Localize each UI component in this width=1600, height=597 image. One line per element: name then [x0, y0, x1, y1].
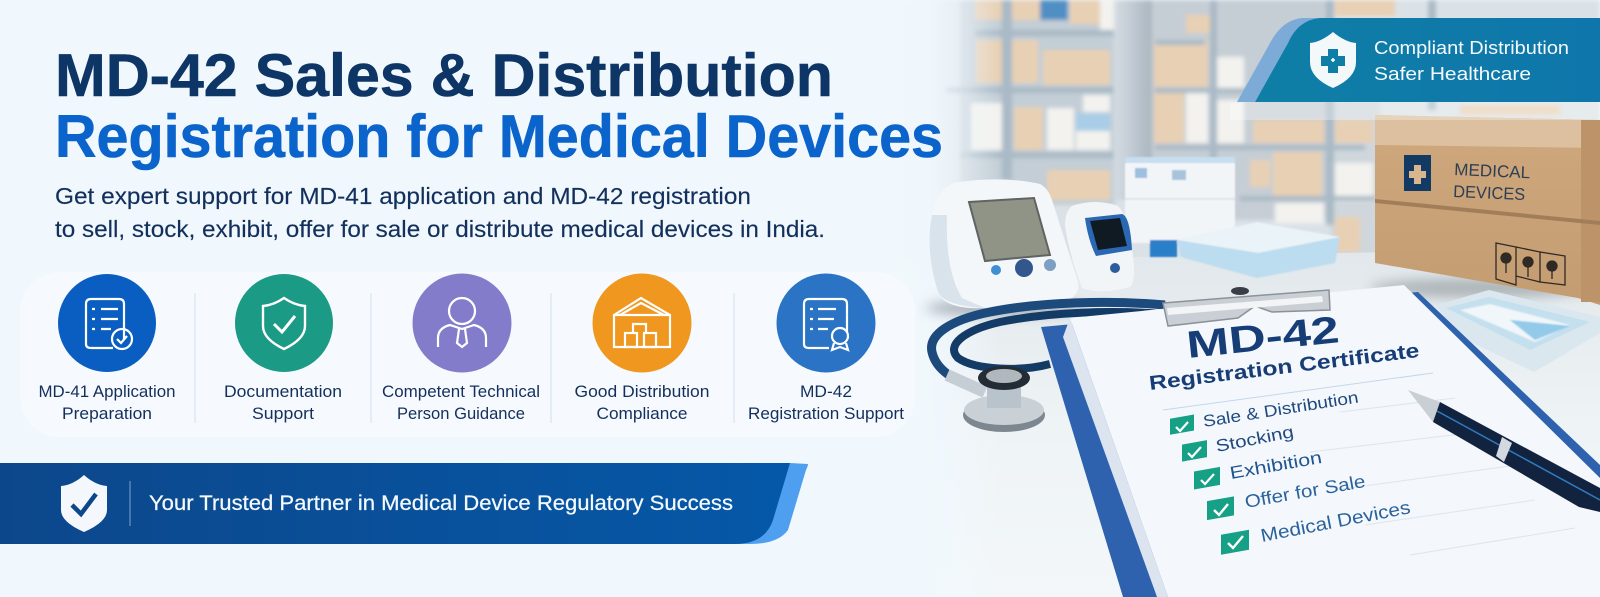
label: MD-42: [800, 383, 852, 401]
photo: clipboard: [1041, 285, 1600, 597]
check item: offer for sale: [1207, 471, 1367, 520]
label: Compliance: [596, 405, 688, 423]
check item: stocking: Stocking: [1214, 422, 1295, 456]
box label text: MEDICAL: [1454, 160, 1531, 182]
photo: pill tray: [1436, 290, 1600, 372]
soft panel behind the services row: [20, 272, 915, 437]
translucent strip under badge: [1230, 102, 1600, 120]
badge text: Compliant Distribution: [1374, 37, 1569, 58]
check item: offer for sale: Offer for Sale: [1243, 471, 1367, 512]
bottom banner: [0, 463, 808, 544]
box handling symbols: [1496, 243, 1565, 285]
label: Registration Support: [748, 405, 904, 423]
subtitle: [55, 183, 825, 242]
check item: sale and distribution: [1170, 389, 1360, 435]
banner text: Your Trusted Partner in Medical Device Regulatory Success: [149, 492, 733, 515]
label: Good Distribution: [574, 383, 710, 401]
check item: exhibition: [1194, 447, 1323, 489]
icon: document with check: [86, 299, 132, 349]
check item: sale and distribution: Sale & Distribution: [1202, 389, 1360, 431]
label: Support: [252, 405, 314, 423]
photo: pen: [1408, 390, 1600, 512]
stethoscope chest piece: [963, 366, 1045, 432]
check item: medical devices: [1221, 496, 1412, 555]
label: Competent Technical: [382, 383, 540, 401]
box logo: [1404, 155, 1431, 191]
certificate subheading: Registration Certificate: [1148, 340, 1421, 395]
service: MD-41 application preparation: [38, 274, 176, 423]
photo: white medicine boxes: [1125, 157, 1340, 278]
icon: person with tie: [438, 298, 486, 347]
photo: patient monitor: [1065, 202, 1134, 291]
certificate heading: MD-42: [1185, 309, 1341, 367]
label: [38, 383, 176, 423]
service: documentation support: [224, 274, 342, 423]
title: [55, 42, 943, 170]
badge text: [1374, 37, 1569, 84]
photo: stethoscope: [932, 302, 1165, 432]
service: good distribution compliance: [574, 274, 710, 423]
left fade over the photo and table: [870, 0, 1000, 597]
photo: table surface: [880, 248, 1600, 597]
title: Registration for Medical Devices: [55, 103, 943, 170]
badge text: Safer Healthcare: [1374, 63, 1531, 84]
icon: shield with cross: [1310, 32, 1356, 88]
check item: stocking: [1182, 422, 1295, 462]
service: competent technical person guidance: [382, 274, 540, 423]
label: MD-41 Application: [38, 383, 176, 401]
box label text: [1453, 160, 1531, 204]
service: MD-42 registration support: [748, 274, 904, 423]
certificate paper: [1063, 318, 1168, 597]
icon: shield check: [263, 298, 305, 349]
checklist: [1170, 389, 1412, 555]
photo: warehouse shelves background: [900, 0, 1600, 270]
label: [224, 383, 342, 423]
label: Preparation: [62, 405, 152, 423]
icon: warehouse with boxes: [614, 298, 670, 347]
icon: document with award ribbon: [804, 299, 848, 350]
label: Person Guidance: [397, 405, 525, 423]
subtitle: Get expert support for MD-41 application and MD-42 registration: [55, 183, 751, 209]
label: [748, 383, 904, 423]
title: MD-42 Sales & Distribution: [55, 42, 833, 109]
photo: blood pressure monitor: [925, 179, 1085, 315]
top right badge: [1237, 18, 1600, 102]
subtitle: to sell, stock, exhibit, offer for sale or distribute medical devices in India.: [55, 216, 825, 242]
label: [574, 383, 710, 423]
box label text: DEVICES: [1453, 182, 1526, 204]
label: [382, 383, 540, 423]
check item: medical devices: Medical Devices: [1259, 496, 1412, 546]
check item: exhibition: Exhibition: [1228, 447, 1323, 483]
photo: cardboard box labelled medical devices: [1370, 115, 1600, 305]
label: Documentation: [224, 383, 342, 401]
clipboard metal clip: [1163, 287, 1330, 326]
icon: white shield check: [61, 475, 107, 532]
